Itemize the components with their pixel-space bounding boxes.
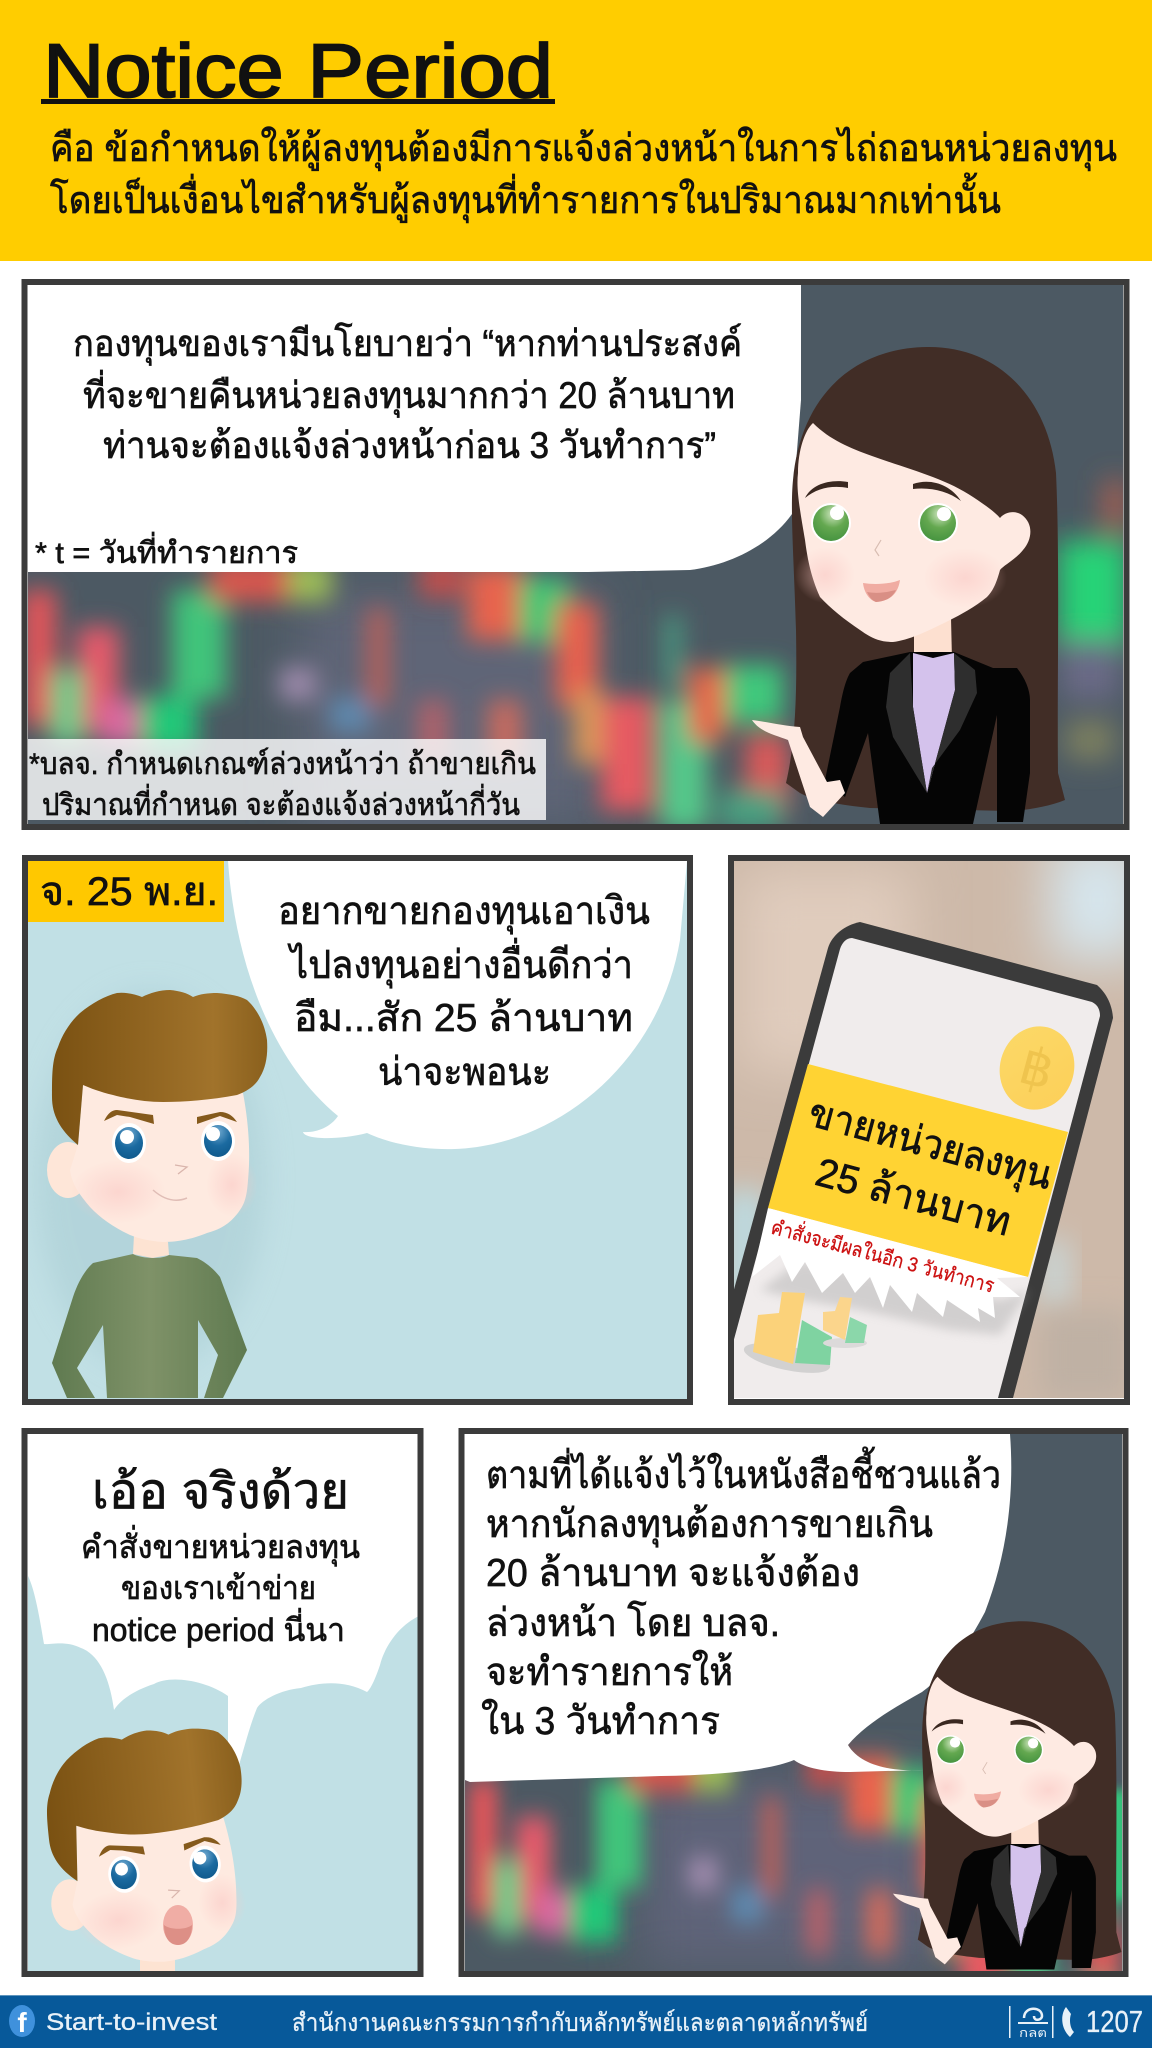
panel 4: investor surprised xyxy=(24,1431,420,1980)
bubble quote text xyxy=(73,322,742,466)
thought text: น่าจะพอนะ xyxy=(378,1051,551,1094)
blurred stock chart background xyxy=(465,1434,1130,2020)
explanation text: 20 ล้านบาท จะแจ้งต้อง xyxy=(486,1552,860,1595)
definition text xyxy=(50,127,1117,223)
bubble quote text: ท่านจะต้องแจ้งล่วงหน้าก่อน 3 วันทำการ” xyxy=(103,425,716,466)
date tag xyxy=(28,861,224,922)
definition text: โดยเป็นเงื่อนไขสำหรับผู้ลงทุนที่ทำรายการในปริมาณมากเท่านั้น xyxy=(50,172,1001,223)
man head surprised xyxy=(34,1721,260,1980)
explanation text: ล่วงหน้า โดย บลจ. xyxy=(486,1601,780,1645)
footnote: t definition: * t = วันที่ทำรายการ xyxy=(35,532,298,570)
cloud speech bubble xyxy=(28,1434,419,1765)
explanation text xyxy=(481,1446,1001,1743)
coins and banknotes illustration xyxy=(741,1292,867,1379)
torn paper shadow xyxy=(760,1260,1030,1335)
footer bar xyxy=(0,1995,1152,2048)
banner text xyxy=(803,1091,1057,1245)
panel 1: fund policy announcement xyxy=(22,282,1128,830)
speech bubble xyxy=(465,1434,1011,1782)
phone xyxy=(733,922,1113,1398)
explanation text: หากนักลงทุนต้องการขายเกิน xyxy=(486,1503,933,1548)
note box: *บลจ. กำหนดเกณฑ์ล่วงหน้าว่า ถ้าขายเกิน xyxy=(29,747,536,781)
date tag: จ. 25 พ.ย. xyxy=(40,870,218,914)
bubble quote text: ที่จะขายคืนหน่วยลงทุนมากกว่า 20 ล้านบาท xyxy=(83,369,735,418)
coin icon: ฿ xyxy=(1013,1037,1060,1101)
panel 2: investor thinking xyxy=(25,858,690,1402)
thought bubble xyxy=(228,861,687,1149)
header band xyxy=(0,0,1152,261)
red notice text: คำสั่งจะมีผลในอีก 3 วันทำการ xyxy=(769,1213,998,1298)
title: Notice Period: Notice Period xyxy=(43,29,553,114)
thought text: ไปลงทุนอย่างอื่นดีกว่า xyxy=(287,938,633,989)
explanation text: จะทำรายการให้ xyxy=(486,1650,733,1694)
torn paper strip xyxy=(752,1208,1028,1322)
icon: facebook xyxy=(9,2005,35,2038)
explanation text: ใน 3 วันทำการ xyxy=(481,1699,720,1743)
panel 5: fund explains xyxy=(462,1431,1130,2020)
facebook page name: Start-to-invest xyxy=(46,2009,217,2036)
icon: facebook: f xyxy=(17,2007,27,2038)
thought text: อยากขายกองทุนเอาเงิน xyxy=(278,890,650,935)
blurred stock chart background xyxy=(22,285,1128,830)
blurred background xyxy=(734,861,1124,1398)
SEC logo and hotline xyxy=(1009,2004,1143,2040)
woman presenter xyxy=(752,347,1065,824)
bubble text: notice period นี่นา xyxy=(92,1608,345,1648)
organisation name: สำนักงานคณะกรรมการกำกับหลักทรัพย์และตลาดหลักทรัพย์ xyxy=(292,2009,868,2037)
banner text: ขายหน่วยลงทุน xyxy=(803,1091,1057,1200)
speech bubble xyxy=(28,285,801,572)
SEC logo and hotline: กลต xyxy=(1019,2026,1047,2040)
exclamation heading: เอ้อ จริงด้วย xyxy=(92,1465,349,1519)
banner text: 25 ล้านบาท xyxy=(811,1150,1016,1245)
panel 3: phone order screen xyxy=(725,840,1145,1402)
note box xyxy=(28,739,546,822)
woman presenter xyxy=(893,1621,1121,1970)
coin icon xyxy=(990,1018,1084,1118)
bubble text: คำสั่งขายหน่วยลงทุน xyxy=(81,1525,360,1567)
thought text: อืม...สัก 25 ล้านบาท xyxy=(294,997,633,1040)
bubble quote text: กองทุนของเรามีนโยบายว่า “หากท่านประสงค์ xyxy=(73,322,742,366)
bubble text xyxy=(81,1525,360,1648)
man character xyxy=(35,990,267,1398)
yellow banner xyxy=(768,1064,1068,1277)
thought text xyxy=(278,890,650,1094)
explanation text: ตามที่ได้แจ้งไว้ในหนังสือชี้ชวนแล้ว xyxy=(486,1446,1001,1497)
note box: ปริมาณที่กำหนด จะต้องแจ้งล่วงหน้ากี่วัน xyxy=(42,784,520,822)
bubble text: ของเราเข้าข่าย xyxy=(121,1570,316,1606)
